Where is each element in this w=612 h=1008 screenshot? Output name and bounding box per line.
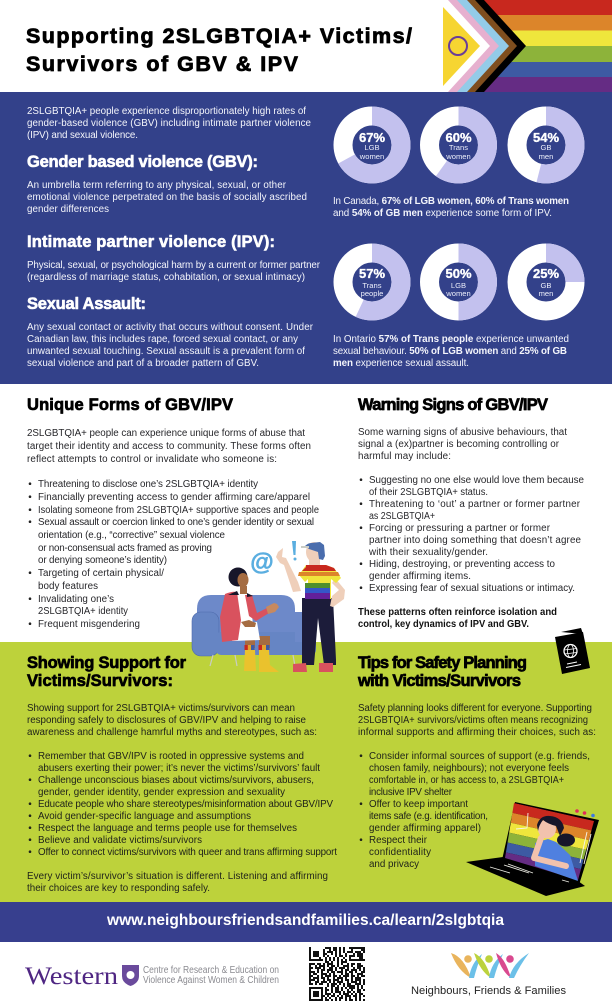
text: sexual assault definition: Any sexual contact or activity that occurs without consent. Under: [27, 322, 314, 333]
donut chart: 57% Trans people: [343, 253, 401, 311]
heading: Unique Forms of GBV/IPV: [27, 396, 233, 414]
text: Ontario statistics: [333, 334, 569, 369]
bullet list: Forcing or pressuring a partner or former: [369, 523, 551, 534]
donut chart: 60% Trans women: [430, 116, 488, 174]
heading: Showing Support for: [27, 654, 187, 672]
intro text: [358, 703, 596, 738]
bullet list: Avoid gender-specific language and assumptions: [38, 811, 251, 822]
donut chart: 60% Trans women: Trans: [449, 143, 468, 152]
closing text: [27, 871, 328, 894]
text: GBV definition: gender differences: [27, 204, 109, 215]
text: sexual assault definition: [27, 322, 314, 369]
banner: website URL: www.neighboursfriendsandfamilies.ca/learn/2slgbtqia: [106, 912, 504, 929]
donut chart: 60% Trans women: 60%: [445, 130, 472, 145]
donut chart: 57% Trans people: people: [361, 289, 383, 298]
bullet list: Respect their: [369, 835, 428, 846]
text: sexual assault definition: unwanted sexual touching. Sexual assault is a prevalent form of: [27, 346, 305, 357]
donut chart: 57% Trans people: Trans: [362, 281, 382, 290]
heading: Warning Signs of GBV/IPV: [358, 396, 548, 414]
bullet list: gender affirming apparel): [369, 823, 481, 834]
text: Ontario statistics: In Ontario 57% of Trans people experience unwanted: [333, 334, 569, 345]
bullet list: gender, gender identity, gender expression and sexuality: [38, 787, 285, 798]
heading: Victims/Survivors:: [27, 672, 173, 690]
illustration: two people talking on a sofa: [192, 541, 345, 672]
heading: [27, 654, 187, 690]
intro text: Showing support for 2SLGBTQIA+ victims/survivors can mean: [27, 703, 295, 714]
intro text: target their identity and access to community. These forms often: [27, 441, 311, 452]
heading: with Victims/Survivors: [357, 672, 521, 690]
bullet list: Targeting of certain physical/: [38, 568, 164, 579]
bullet list: orientation (e.g., “corrective” sexual violence: [38, 530, 226, 541]
text: IPV definition: Physical, sexual, or psychological harm by a current or former partner: [27, 260, 321, 271]
bullet list: Hiding, destroying, or preventing access to: [369, 559, 556, 570]
bullet list: Offer to keep important: [369, 799, 468, 810]
donut chart: 67% LGB women: LGB: [364, 143, 380, 152]
logo: Western Centre for Research and Education: Western: [25, 963, 119, 990]
bullet list: Threatening to ‘out’ a partner or former partner: [369, 499, 581, 510]
progress pride flag: [443, 0, 612, 93]
text: Ontario statistics: men experience sexual assault.: [333, 358, 469, 369]
bullet list: gender affirming items.: [369, 571, 471, 582]
donut chart: 67% LGB women: [343, 116, 401, 174]
logo: Neighbours, Friends and Families: [411, 953, 566, 997]
closing statement: [358, 607, 557, 630]
intro text: [358, 427, 567, 462]
donut chart: 25% GB men: [517, 253, 575, 311]
donut chart: 57% Trans people: 57%: [359, 266, 385, 281]
bullet list: comfortable in, or has access to, a 2SLGBTQIA+: [369, 775, 564, 786]
bullet list: Financially preventing access to gender affirming care/apparel: [38, 492, 310, 503]
intro text: signal a (ex)partner is becoming controlling or: [358, 439, 560, 450]
bullet list: abusers exerting their power; it’s never the victims’/survivors’ fault: [38, 763, 320, 774]
bullet list: or non-consensual acts framed as proving: [38, 543, 212, 554]
donut chart: 54% GB men: [517, 116, 575, 174]
closing text: Every victim’s/survivor’s situation is different. Listening and affirming: [27, 871, 328, 882]
QR code: [309, 948, 365, 1000]
intro text: [27, 703, 317, 738]
panel: green support section: [0, 642, 612, 902]
panel: definitions and statistics: [0, 92, 612, 384]
donut chart: 50% LGB women: LGB: [451, 281, 466, 290]
intro text: (IPV) and sexual violence.: [27, 130, 138, 141]
donut chart: 54% GB men: 54%: [533, 130, 559, 145]
donut chart: 25% GB men: men: [539, 289, 553, 298]
logo: Western Centre for Research and Education: [25, 963, 279, 990]
intro text: Some warning signs of abusive behaviours, that: [358, 427, 567, 438]
heading: Tips for Safety Planning: [358, 654, 527, 672]
donut chart: 54% GB men: GB: [541, 143, 551, 152]
panel: warning signs: [358, 396, 585, 630]
intro text: [27, 428, 311, 465]
closing statement: These patterns often reinforce isolation and: [358, 607, 557, 618]
bullet list: Frequent misgendering: [38, 619, 140, 630]
bullet list: Educate people who share stereotypes/misinformation about GBV/IPV: [38, 799, 333, 810]
intro text: informal supports and affirming their choices, such as:: [358, 727, 596, 738]
text: GBV definition: [27, 180, 307, 215]
text: GBV definition: emotional violence perpetrated on the basis of socially ascribed: [27, 192, 307, 203]
logo: Western Centre for Research and Education: Violence Against Women & Children: [143, 975, 279, 986]
bullet list: 2SLGBTQIA+ identity: [38, 606, 128, 617]
title: Survivors of GBV & IPV: [26, 52, 299, 76]
closing text: their choices are key to responding safely.: [27, 883, 210, 894]
bullet list: confidentiality: [369, 847, 431, 858]
illustration: person at rainbow laptop: [466, 802, 599, 896]
donut chart: 67% LGB women: women: [359, 152, 384, 161]
bullet list: Respect the language and terms people use for themselves: [38, 823, 297, 834]
heading: sexual assault: Sexual Assault:: [27, 295, 146, 313]
bullet list: of their 2SLGBTQIA+ status.: [369, 487, 488, 498]
donut chart: 60% Trans women: women: [445, 152, 471, 161]
bullet list: Invalidating one’s: [38, 594, 114, 605]
title: Supporting 2SLGBTQIA+ Victims/: [26, 24, 412, 48]
closing statement: control, key dynamics of IPV and GBV.: [358, 619, 529, 630]
panel: tips for safety planning: [357, 654, 596, 870]
donut chart: 50% LGB women: 50%: [445, 266, 472, 281]
logo: Western Centre for Research and Education: Centre for Research & Education on: [143, 965, 279, 976]
intro text: awareness and challenge hamrful myths and stereotypes, such as:: [27, 727, 317, 738]
title: [26, 24, 412, 76]
bullet list: items safe (e.g. identification,: [369, 811, 488, 822]
bullet list: [29, 751, 337, 858]
text: Canada statistics: In Canada, 67% of LGB women, 60% of Trans women: [333, 196, 569, 207]
heading: gender based violence: Gender based violence (GBV):: [27, 153, 258, 171]
text: Ontario statistics: sexual behaviour. 50% of LGB women and 25% of GB: [333, 346, 567, 357]
bullet list: Isolating someone from 2SLGBTQIA+ supportive spaces and people: [38, 505, 320, 516]
bullet list: chosen family, neighbours); not everyone feels: [369, 763, 569, 774]
donut chart: 67% LGB women: 67%: [359, 130, 385, 145]
text: sexual assault definition: sexual violence and part of a broader pattern of GBV.: [27, 358, 259, 369]
intro text: [27, 106, 312, 141]
donut chart: 25% GB men: GB: [541, 281, 551, 290]
icon: passport: [555, 628, 590, 674]
intro text: Safety planning looks different for everyone. Supporting: [358, 703, 592, 714]
bullet list: [29, 479, 320, 630]
bullet list: Threatening to disclose one’s 2SLGBTQIA+ identity: [38, 479, 258, 490]
text: GBV definition: An umbrella term referring to any physical, sexual, or other: [27, 180, 287, 191]
intro text: 2SLGBTQIA+ people can experience unique forms of abuse that: [27, 428, 305, 439]
bullet list: and privacy: [369, 859, 419, 870]
intro text: gender-based violence (GBV) including intimate partner violence: [27, 118, 312, 129]
donut chart: 50% LGB women: women: [445, 289, 471, 298]
intro text: 2SLGBTQIA+ people experience disproportionately high rates of: [27, 106, 306, 117]
intro text: reflect attempts to control or invalidate who someone is:: [27, 454, 277, 465]
logo: Neighbours, Friends and Families: Neighbours, Friends & Families: [411, 985, 566, 997]
bullet list: Suggesting no one else would love them because: [369, 475, 585, 486]
bullet list: Remember that GBV/IPV is rooted in oppressive systems and: [38, 751, 304, 762]
heading: intimate partner violence: Intimate partner violence (IPV):: [27, 233, 275, 251]
text: IPV definition: (regardless of marriage status, cohabitation, or sexual intimacy): [27, 272, 305, 283]
bullet list: Expressing fear of sexual situations or intimacy.: [369, 583, 575, 594]
bullet list: inclusive IPV shelter: [369, 787, 453, 798]
bullet list: Offer to connect victims/survivors with queer and trans affirming support: [38, 847, 337, 858]
bullet list: body features: [38, 581, 98, 592]
icon: at sign: @: [250, 549, 274, 576]
bullet list: or denying someone’s identity): [38, 555, 167, 566]
person seated: [220, 568, 279, 672]
donut chart: 50% LGB women: [430, 253, 488, 311]
banner: website URL: [0, 902, 612, 942]
text: Canada statistics: [333, 196, 569, 219]
donut chart: 25% GB men: 25%: [533, 266, 559, 281]
intro text: harmful may include:: [358, 451, 451, 462]
bullet list: Believe and validate victims/survivors: [38, 835, 202, 846]
bullet list: [360, 751, 590, 870]
intro text: 2SLGBTQIA+ survivors/victims often means recognizing: [358, 715, 588, 726]
text: IPV definition: [27, 260, 321, 283]
person in rainbow shirt: [276, 542, 345, 672]
bullet list: Challenge unconscious biases about victims/survivors, abusers,: [38, 775, 314, 786]
text: sexual assault definition: Canadian law, this includes rape, forced sexual contact, or any: [27, 334, 298, 345]
bullet list: as 2SLGBTQIA+: [369, 511, 435, 522]
panel: showing support: [27, 654, 337, 894]
icon: exclamation mark: [292, 541, 296, 560]
sofa: [192, 595, 316, 666]
bullet list: partner into doing something that doesn’t agree: [369, 535, 582, 546]
bullet list: Consider informal sources of support (e.g. friends,: [369, 751, 590, 762]
intro text: responding safely to disclosures of GBV/IPV and helping to raise: [27, 715, 307, 726]
bullet list: Sexual assault or coercion linked to one’s gender identity or sexual: [38, 517, 314, 528]
text: Canada statistics: and 54% of GB men experience some form of IPV.: [333, 208, 552, 219]
heading: [357, 654, 527, 690]
panel: unique forms of GBV/IPV: [27, 396, 320, 630]
bullet list: [360, 475, 585, 594]
donut chart: 54% GB men: men: [539, 152, 553, 161]
bullet list: with their sexuality/gender.: [368, 547, 488, 558]
